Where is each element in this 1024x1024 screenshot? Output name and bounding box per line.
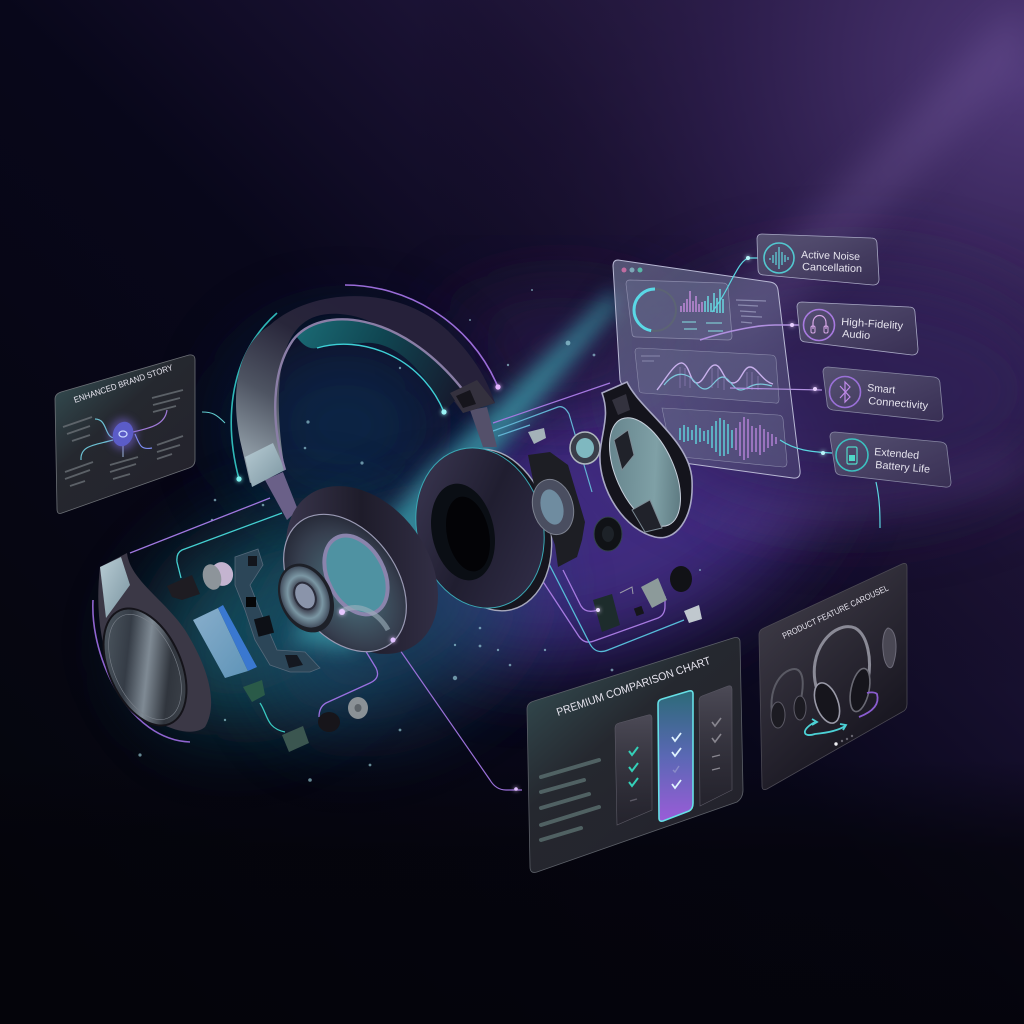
stem: left (265, 472, 298, 520)
heading: enhanced brand story: ENHANCED BRAND STORY (72, 362, 174, 405)
sub-panel: waveform (662, 408, 787, 467)
main PCB (235, 549, 320, 672)
heading: PRODUCT FEATURE CAROUSEL (781, 583, 890, 641)
left ear cup (255, 457, 469, 683)
label: Smart (867, 382, 896, 396)
battery (193, 605, 257, 678)
callout connectors (700, 256, 880, 528)
label: Extended (874, 446, 920, 462)
label: Cancellation (802, 261, 862, 275)
label: Audio (842, 328, 871, 342)
icon: sound wave (764, 243, 794, 273)
label: Connectivity (868, 395, 929, 412)
icon: battery (836, 439, 868, 471)
rotation arrows (805, 692, 878, 735)
callout: high-fidelity audio (797, 302, 918, 355)
label (874, 446, 931, 476)
donut gauge (634, 289, 676, 331)
left outer ear shell (87, 553, 211, 738)
pagination dots (834, 735, 853, 746)
icon: brand hub node (109, 418, 137, 450)
small black connector (167, 575, 200, 600)
connector: cup to comparison chart (393, 640, 522, 791)
stem: right (470, 407, 497, 447)
headphones main (236, 296, 568, 683)
panel: product feature carousel (759, 563, 907, 790)
sub-panel: ring and spectrum (626, 280, 732, 340)
connector: brand story to headband (202, 412, 225, 423)
right ear cup (399, 434, 568, 624)
lower right components (593, 566, 702, 632)
left driver (267, 554, 345, 642)
arc: teal left of headband (231, 313, 277, 482)
label: High-Fidelity (841, 316, 904, 332)
star particles (138, 289, 701, 782)
icon: bluetooth (830, 376, 860, 408)
connectors: left component wires (130, 498, 378, 732)
label (801, 249, 862, 275)
right back shell (595, 382, 695, 538)
right small driver (570, 432, 600, 464)
label (867, 382, 929, 412)
icon: headphones (804, 310, 834, 340)
small PCB pieces (243, 680, 309, 752)
flow connectors (81, 410, 167, 460)
connectors: upper right component wires (493, 383, 610, 492)
headband (236, 296, 495, 487)
headphones: left small (771, 669, 806, 728)
arc: purple above headband (345, 285, 501, 390)
lower small parts (318, 697, 368, 732)
label: Battery Life (875, 459, 931, 476)
panel: enhanced brand story (55, 355, 195, 514)
callout: extended battery life (830, 432, 951, 487)
headphones: center (809, 627, 873, 726)
text placeholder lines (63, 390, 183, 486)
column three (699, 686, 732, 806)
connectors: lower right component wires (540, 560, 684, 652)
label (841, 316, 904, 342)
small connector (528, 428, 546, 444)
sub-panel: line chart (635, 348, 779, 403)
bar spectrum (681, 289, 723, 313)
panel: premium comparison chart (527, 638, 743, 872)
right PCB and driver (526, 452, 585, 567)
dashboard panel (613, 260, 800, 478)
callout: smart connectivity (823, 367, 943, 421)
label: Active Noise (801, 249, 860, 263)
heading: PREMIUM COMPARISON CHART (555, 655, 712, 719)
callout: active noise cancellation (757, 234, 879, 285)
column one (615, 715, 652, 825)
arc: purple around outer shell (93, 600, 190, 742)
window dots (622, 268, 642, 272)
mini text lines (736, 300, 766, 323)
headphones: right side view (883, 628, 896, 668)
dark speaker right (594, 517, 622, 551)
magnet cylinder (200, 559, 236, 592)
feature lines (541, 760, 599, 840)
column two highlighted (658, 691, 693, 821)
